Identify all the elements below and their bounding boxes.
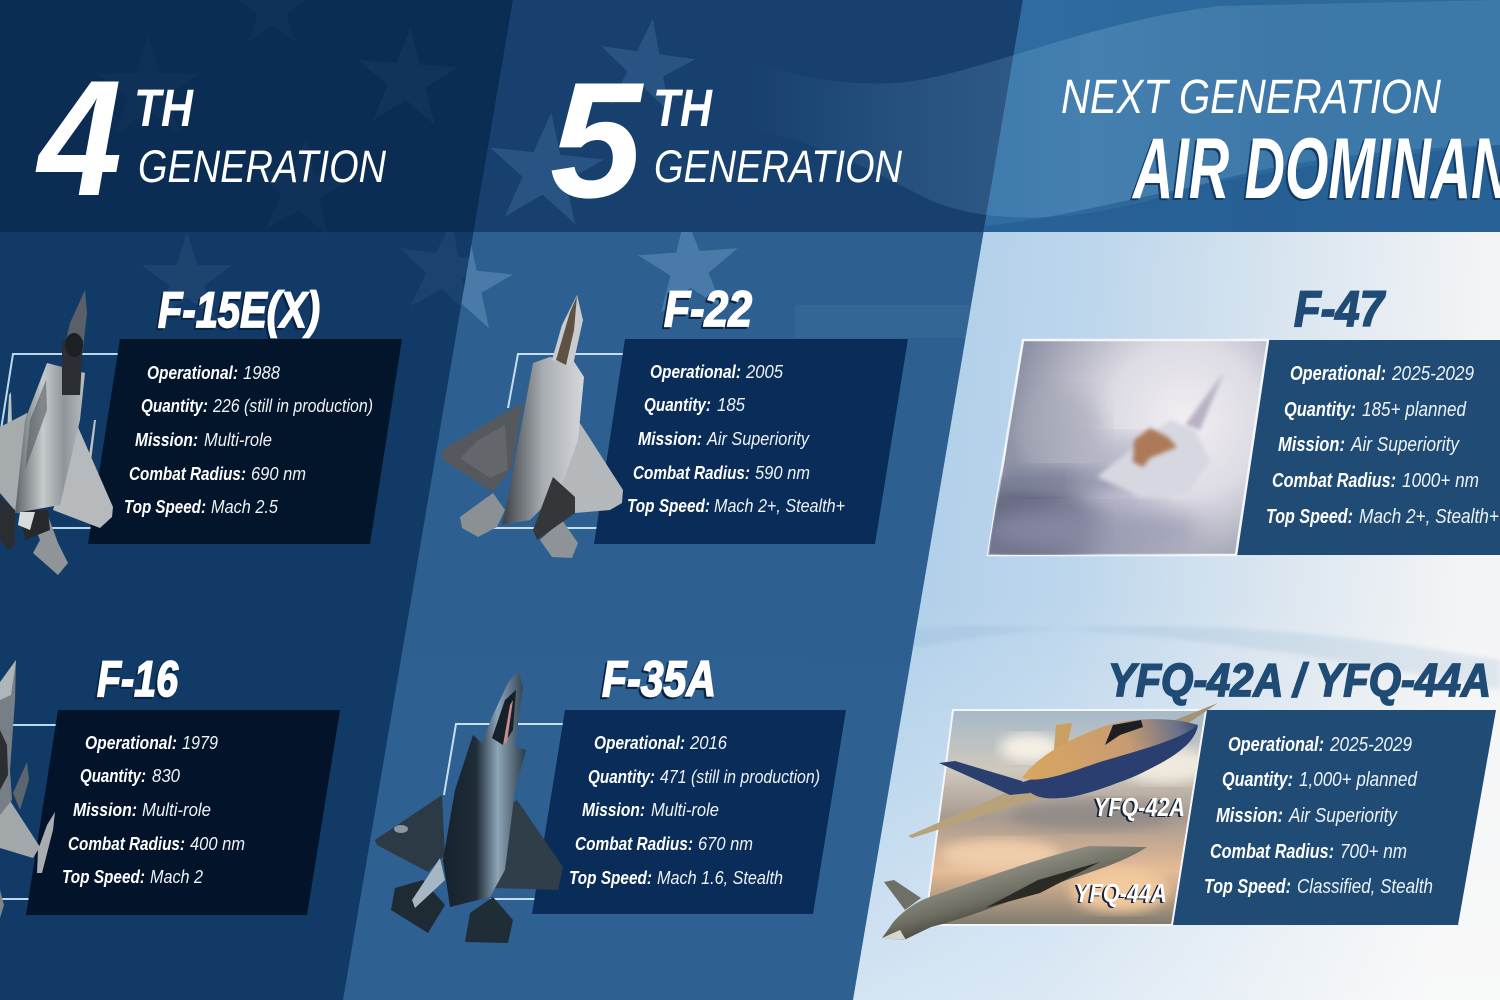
spec list: Top Speed: <box>1266 506 1353 528</box>
data panel <box>532 710 846 914</box>
title: F-16 <box>97 651 179 707</box>
header stars column 1 <box>368 61 378 120</box>
spec list: Top Speed: <box>1204 876 1291 898</box>
spec list: 226 (still in production) <box>212 395 373 416</box>
aircraft: F-35 top view <box>375 670 563 943</box>
spec list: Mission: <box>135 429 198 450</box>
frame behind aircraft <box>0 354 125 528</box>
card: F-35A <box>375 651 846 943</box>
spec list: Quantity: <box>1222 769 1293 791</box>
spec list: Top Speed: <box>569 867 652 888</box>
spec list: Combat Radius: <box>68 833 185 854</box>
spec list: 400 nm <box>190 833 245 854</box>
data panel <box>594 339 908 544</box>
title: F-15E(X) <box>158 282 320 338</box>
aircraft: YFQ-44A <box>882 846 1147 940</box>
spec list: Mach 2.5 <box>211 496 279 517</box>
spec list: Multi-role <box>142 799 211 820</box>
aircraft: F-16 partial top view <box>0 660 55 918</box>
numeral 4: 4 <box>35 46 122 230</box>
spec list: Operational: <box>85 732 177 753</box>
background: column 3 flag streak <box>900 626 1500 690</box>
spec list: 2025-2029 <box>1329 734 1412 756</box>
spec list: 1988 <box>243 362 281 383</box>
spec list: Quantity: <box>141 395 208 416</box>
spec list: Quantity: <box>588 766 655 787</box>
spec list: 1979 <box>182 732 218 753</box>
spec list: 690 nm <box>251 463 306 484</box>
spec list: Quantity: <box>80 765 146 786</box>
spec list: 471 (still in production) <box>660 766 820 787</box>
word generation: GENERATION <box>138 141 386 192</box>
spec list: Multi-role <box>204 429 272 450</box>
TH suffix: TH <box>653 79 713 138</box>
header stars column 2 <box>490 19 695 224</box>
data panel <box>1236 340 1500 555</box>
aircraft: F-22 top view <box>442 295 623 558</box>
title: F-35A <box>602 651 716 707</box>
frame behind aircraft <box>0 725 60 899</box>
spec list: Operational: <box>650 361 741 382</box>
heading: 5th generation <box>550 48 902 232</box>
spec list: Operational: <box>147 362 238 383</box>
header band: column 1 <box>0 0 520 232</box>
spec list: Quantity: <box>1284 399 1356 421</box>
spec list: 185 <box>717 394 746 415</box>
spec list: Combat Radius: <box>129 463 246 484</box>
heading: 4th generation <box>35 46 386 230</box>
heading: next generation air dominance <box>1061 71 1500 217</box>
spec list: Mission: <box>1216 805 1283 827</box>
header band: column 2 <box>470 0 1030 232</box>
spec list: Air Superiority <box>706 428 811 449</box>
spec list <box>1204 734 1433 898</box>
image: F-47 in vapor cloud <box>986 338 1270 556</box>
image label: YFQ-42A: YFQ-42A <box>1094 792 1185 822</box>
spec list <box>124 362 373 517</box>
spec list: Air Superiority <box>1350 434 1460 456</box>
spec list: 670 nm <box>698 833 753 854</box>
spec list: Mission: <box>73 799 137 820</box>
data panel <box>26 710 340 915</box>
aircraft: F-15 top view <box>0 290 113 575</box>
header band: column 3 <box>980 0 1500 232</box>
spec list: Top Speed: <box>627 495 710 516</box>
spec list: 830 <box>152 765 181 786</box>
word generation: GENERATION <box>654 141 902 192</box>
spec list: Mach 2+, Stealth+ <box>714 495 845 516</box>
spec list: Operational: <box>1290 363 1386 385</box>
spec list: 590 nm <box>755 462 810 483</box>
data panel <box>1172 710 1496 925</box>
spec list: Combat Radius: <box>1272 470 1396 492</box>
background: column 3 body <box>850 0 1500 1000</box>
header base band, column 3 <box>983 145 1500 232</box>
spec list: Combat Radius: <box>1210 841 1334 863</box>
spec list: Multi-role <box>651 799 719 820</box>
spec list: Air Superiority <box>1288 805 1398 827</box>
card: YFQ-42A / YFQ-44A <box>882 654 1496 940</box>
spec list: 2005 <box>745 361 784 382</box>
spec list: Mission: <box>582 799 645 820</box>
spec list: Quantity: <box>644 394 711 415</box>
data panel <box>88 339 402 544</box>
card: F-22 <box>442 281 908 558</box>
background: column 2 body <box>343 232 984 1000</box>
spec list: Operational: <box>594 732 685 753</box>
background: flag stars column 2 <box>461 232 738 328</box>
spec list: Mission: <box>1278 434 1345 456</box>
card: F-16 <box>0 651 340 918</box>
frame behind aircraft <box>444 724 570 899</box>
numeral 5: 5 <box>550 48 644 232</box>
TH suffix: TH <box>134 79 194 138</box>
spec list: Combat Radius: <box>633 462 750 483</box>
spec list <box>62 732 245 887</box>
spec list: 2025-2029 <box>1391 363 1474 385</box>
spec list: 1000+ nm <box>1402 470 1479 492</box>
spec list: Mach 2 <box>150 866 204 887</box>
aircraft: YFQ-42A <box>908 703 1218 838</box>
spec list: Classified, Stealth <box>1297 876 1433 898</box>
spec list <box>627 361 845 516</box>
background: flag stars column 1 <box>142 232 469 318</box>
spec list: Top Speed: <box>62 866 145 887</box>
background: column 3 lower glow <box>853 690 1380 1000</box>
card: F-15E(X) <box>0 282 402 575</box>
spec list <box>1266 363 1500 528</box>
spec list: Mach 1.6, Stealth <box>657 867 783 888</box>
spec list: Mission: <box>638 428 702 449</box>
image: sky background <box>925 710 1210 925</box>
frame behind aircraft <box>492 354 630 528</box>
flag fold band across headers <box>828 0 1500 218</box>
spec list: Top Speed: <box>124 496 206 517</box>
spec list <box>569 732 820 888</box>
spec list: Operational: <box>1228 734 1324 756</box>
title: F-47 <box>1294 281 1386 337</box>
spec list: 2016 <box>689 732 728 753</box>
spec list: Combat Radius: <box>575 833 693 854</box>
spec list: 185+ planned <box>1362 399 1467 421</box>
background: column 1 body <box>0 0 520 1000</box>
image label: YFQ-44A: YFQ-44A <box>1075 878 1167 908</box>
spec list: 700+ nm <box>1340 841 1407 863</box>
card: F-47 <box>960 281 1500 565</box>
title: F-22 <box>664 281 752 337</box>
spec list: 1,000+ planned <box>1299 769 1418 791</box>
